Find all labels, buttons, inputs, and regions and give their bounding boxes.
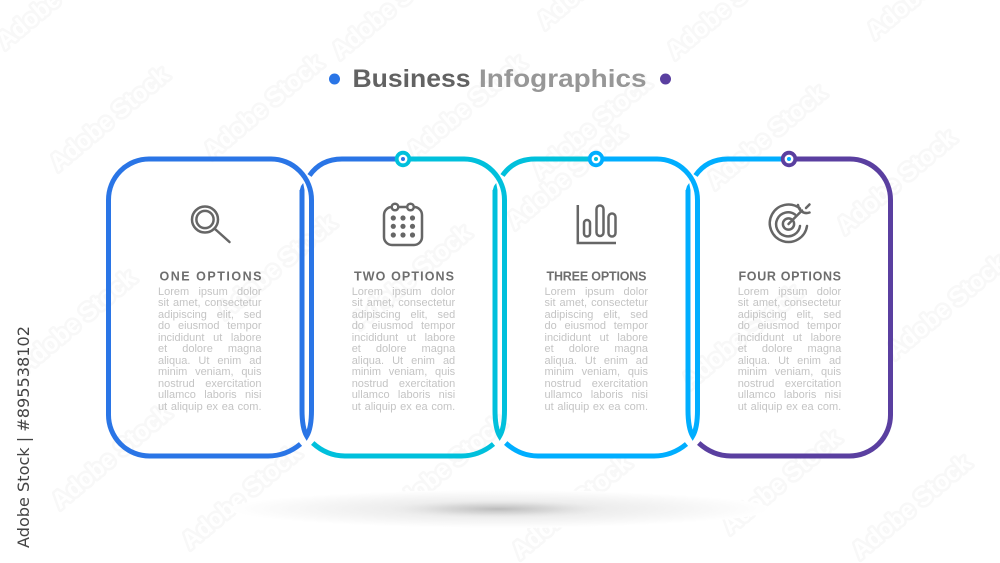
text block: three options: incididunt ut labore (544, 332, 648, 344)
text block: two options: aliqua. Ut enim ad (352, 355, 455, 367)
text block: two options: adipiscing elit, sed (352, 309, 455, 321)
text block: four options: aliqua. Ut enim ad (738, 355, 841, 367)
watermark pattern: Adobe Stock (382, 409, 512, 525)
connector node: card four (781, 151, 797, 167)
watermark pattern: Adobe Stock (702, 79, 832, 195)
text block: three options: sit amet, consectetur (544, 297, 648, 309)
text block: one options: nostrud exercitation (158, 378, 262, 390)
text block: one options: incididunt ut labore (158, 332, 262, 344)
text block: three options: Lorem ipsum dolor (544, 286, 648, 298)
text block: one options: et dolore magna (158, 343, 262, 355)
panel: card two outline (310, 159, 504, 456)
panel: card one outline (108, 159, 312, 456)
text block: three options: aliqua. Ut enim ad (544, 355, 648, 367)
heading: one options: ONE OPTIONS (160, 270, 262, 284)
text block: four options: Lorem ipsum dolor (738, 286, 841, 298)
watermark pattern: Adobe Stock (507, 449, 637, 563)
text block: one options: Lorem ipsum dolor (158, 286, 262, 298)
connector node: card two (395, 151, 411, 167)
text block: two options: Lorem ipsum dolor (352, 286, 455, 298)
watermark pattern: Adobe Stock (717, 424, 847, 540)
text block: three options: minim veniam, quis (544, 366, 648, 378)
text block: two options: do eiusmod tempor (352, 320, 455, 332)
text block: one options: ullamco laboris nisi (158, 389, 262, 401)
text block: four options: minim veniam, quis (738, 366, 841, 378)
watermark pattern: Adobe Stock (199, 49, 329, 165)
text block: three options: ut aliquip ex ea com. (544, 401, 648, 413)
text block: four options: incididunt ut labore (738, 332, 841, 344)
watermark pattern: Adobe Stock (45, 61, 175, 177)
text block: four options: ut aliquip ex ea com. (738, 401, 841, 413)
text block: three options: adipiscing elit, sed (544, 309, 648, 321)
text block: four options: et dolore magna (738, 343, 841, 355)
text block: two options: nostrud exercitation (352, 378, 455, 390)
title (329, 65, 671, 93)
watermark pattern: Adobe Stock (502, 119, 632, 235)
watermark pattern: Adobe Stock (212, 209, 342, 325)
watermark pattern: Adobe Stock (47, 399, 177, 515)
text block: three options: nostrud exercitation (544, 378, 648, 390)
watermark pattern: Adobe Stock (527, 69, 657, 185)
text block: two options (352, 286, 456, 413)
heading: four options: FOUR OPTIONS (738, 270, 841, 284)
watermark pattern: Adobe Stock (177, 439, 307, 555)
watermark pattern: Adobe Stock (402, 49, 532, 165)
text block: one options: sit amet, consectetur (158, 297, 262, 309)
watermark pattern: Adobe Stock (347, 219, 477, 335)
text block: two options: minim veniam, quis (352, 366, 455, 378)
watermark pattern: Adobe Stock (677, 279, 807, 395)
text block: three options: do eiusmod tempor (544, 320, 648, 332)
heading: two options: TWO OPTIONS (354, 270, 454, 284)
title text: Infographics (479, 65, 646, 93)
text block: four options: ullamco laboris nisi (738, 389, 841, 401)
title text: Business (352, 65, 470, 93)
text block: three options: et dolore magna (544, 343, 648, 355)
icon: calendar (384, 204, 422, 245)
title right dot (660, 74, 671, 84)
text block: four options: nostrud exercitation (738, 378, 841, 390)
text block: two options: ut aliquip ex ea com. (352, 401, 455, 413)
text block: one options (158, 286, 262, 413)
stock credit: Adobe Stock | #895538102 (14, 326, 33, 548)
text block: three options (544, 286, 648, 413)
text block: two options: sit amet, consectetur (352, 297, 455, 309)
icon: bar chart (578, 205, 616, 243)
title left dot (329, 74, 340, 84)
text block: one options: do eiusmod tempor (158, 320, 262, 332)
panel: card four outline (696, 159, 890, 456)
text block: four options: adipiscing elit, sed (738, 309, 841, 321)
heading: three options: THREE OPTIONS (546, 270, 646, 284)
text block: one options: ut aliquip ex ea com. (158, 401, 262, 413)
icon: target with arrow (770, 204, 810, 242)
text block: one options: aliqua. Ut enim ad (158, 355, 262, 367)
text block: two options: et dolore magna (352, 343, 455, 355)
text block: four options: do eiusmod tempor (738, 320, 841, 332)
text block: one options: minim veniam, quis (158, 366, 262, 378)
watermark pattern: Adobe Stock (12, 264, 142, 380)
text block: four options: sit amet, consectetur (738, 297, 841, 309)
connector node: card three (588, 151, 604, 167)
text block: four options (738, 286, 842, 413)
ground shadow (230, 490, 770, 528)
text block: one options: adipiscing elit, sed (158, 309, 262, 321)
text block: two options: ullamco laboris nisi (352, 389, 455, 401)
text block: three options: ullamco laboris nisi (544, 389, 648, 401)
icon: magnifier (192, 206, 230, 242)
text block: two options: incididunt ut labore (352, 332, 455, 344)
watermark pattern: Adobe Stock (832, 124, 962, 240)
watermark pattern: Adobe Stock (847, 449, 977, 563)
panel: card three outline (502, 159, 698, 456)
